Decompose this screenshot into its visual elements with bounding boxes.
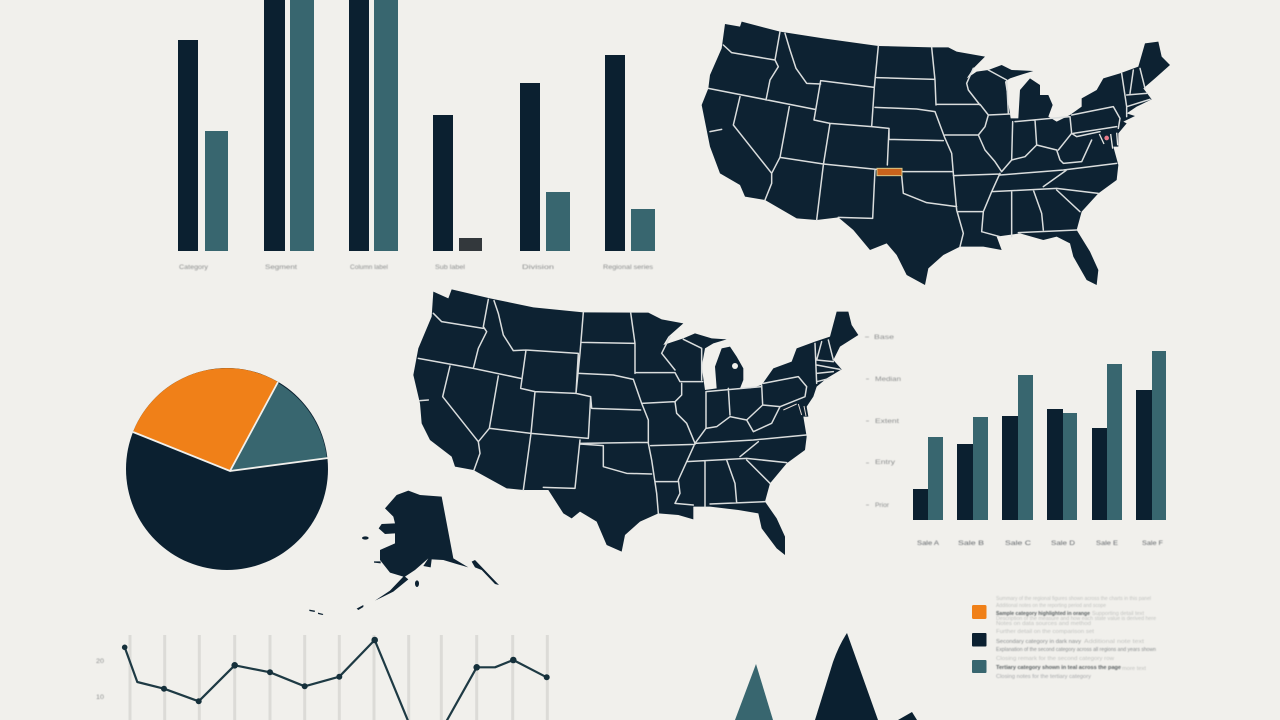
axis labels: Category bbox=[179, 265, 208, 271]
y axis labels: Median bbox=[875, 377, 901, 383]
map silhouette bbox=[702, 22, 1170, 285]
legend text: Notes on data sources and method bbox=[996, 621, 1091, 627]
lake island bbox=[732, 363, 738, 369]
y axis labels: Prior bbox=[875, 503, 889, 509]
legend text: Additional notes on the reporting period and scope bbox=[996, 603, 1106, 609]
coast highlight bbox=[783, 404, 806, 416]
bars: group 4 bbox=[1047, 409, 1077, 520]
y axis labels: Extent bbox=[875, 419, 899, 425]
legend text: Closing remark for the second category row bbox=[996, 656, 1114, 662]
y axis labels: Entry bbox=[875, 460, 895, 466]
legend text: Further detail on the comparison set bbox=[996, 629, 1095, 635]
legend text bbox=[996, 596, 1156, 680]
legend bbox=[972, 596, 1156, 680]
data line bbox=[125, 640, 547, 720]
axis labels: Segment bbox=[265, 265, 297, 271]
bars: group 1 bbox=[178, 40, 228, 251]
x axis labels: Sale E bbox=[1096, 541, 1118, 547]
bar chart: right bbox=[865, 335, 1166, 547]
axis labels: Regional series bbox=[603, 265, 653, 271]
legend: dark swatch bbox=[972, 633, 986, 646]
highlighted panhandle bbox=[877, 168, 902, 176]
legend text: Sample category highlighted in orange bbox=[996, 611, 1090, 617]
x axis labels: Sale B bbox=[958, 541, 984, 547]
triangle: teal bbox=[735, 664, 773, 720]
triangle chart bbox=[735, 633, 917, 720]
bars: group 2 bbox=[264, 0, 314, 251]
map: Alaska bbox=[309, 491, 499, 615]
legend text: Summary of the regional figures shown across the charts in this panel bbox=[996, 596, 1151, 602]
y axis labels: 20 bbox=[96, 659, 105, 665]
x axis labels: Sale C bbox=[1005, 541, 1032, 547]
bars: group 5 bbox=[1092, 364, 1122, 520]
data points bbox=[122, 637, 550, 704]
line chart bbox=[96, 635, 550, 720]
triangle: dark small bbox=[898, 712, 917, 720]
x axis labels bbox=[917, 541, 1163, 547]
legend: orange swatch bbox=[972, 605, 986, 619]
y axis labels: 10 bbox=[96, 695, 105, 701]
bars: group 5 bbox=[520, 83, 570, 251]
bars: group 2 bbox=[957, 417, 988, 520]
legend text: Secondary category in dark navy bbox=[996, 639, 1081, 645]
bars: group 6 bbox=[1136, 351, 1166, 520]
map: United States upper right bbox=[702, 22, 1170, 285]
axis labels: Division bbox=[522, 265, 554, 271]
slice: dark majority bbox=[126, 368, 328, 570]
x axis labels: Sale F bbox=[1142, 541, 1163, 547]
panhandle bbox=[472, 560, 499, 585]
map silhouette bbox=[413, 289, 858, 555]
state borders bbox=[418, 299, 840, 513]
y axis labels: Base bbox=[874, 335, 895, 341]
axis labels bbox=[179, 265, 653, 271]
bars: group 1 bbox=[913, 437, 943, 520]
y axis labels bbox=[865, 335, 901, 509]
legend text: Explanation of the second category across all regions and years shown bbox=[996, 647, 1156, 653]
legend text: Closing notes for the tertiary category bbox=[996, 674, 1092, 680]
islands bbox=[309, 536, 419, 615]
highlighted coast state bbox=[1099, 133, 1118, 149]
legend text: Description of the measure and how each state value is derived here bbox=[996, 616, 1156, 622]
slice: teal bbox=[230, 383, 327, 471]
pie chart bbox=[126, 368, 328, 570]
legend text: Tertiary category shown in teal across the page bbox=[996, 665, 1121, 671]
slice dividers bbox=[133, 382, 328, 471]
legend text: more text bbox=[1122, 666, 1147, 672]
x axis labels: Sale D bbox=[1051, 541, 1076, 547]
triangle: dark tall bbox=[815, 633, 878, 720]
bars: group 4 bbox=[433, 115, 482, 251]
state borders bbox=[708, 32, 1150, 247]
x axis labels: Sale A bbox=[917, 541, 939, 547]
bar chart: top left bbox=[178, 0, 655, 271]
axis labels: Column label bbox=[350, 265, 388, 271]
legend text: Additional note text bbox=[1084, 639, 1145, 645]
bars: group 6 bbox=[605, 55, 655, 251]
legend: teal swatch bbox=[972, 660, 986, 673]
bars: group 3 bbox=[349, 0, 398, 251]
y axis labels bbox=[96, 659, 105, 701]
map: United States centre bbox=[413, 289, 858, 555]
Alaska mainland bbox=[375, 491, 468, 601]
bars: group 3 bbox=[1002, 375, 1033, 520]
legend text: Supporting detail text bbox=[1092, 611, 1145, 617]
axis labels: Sub label bbox=[435, 265, 465, 271]
slice: orange bbox=[133, 368, 278, 471]
